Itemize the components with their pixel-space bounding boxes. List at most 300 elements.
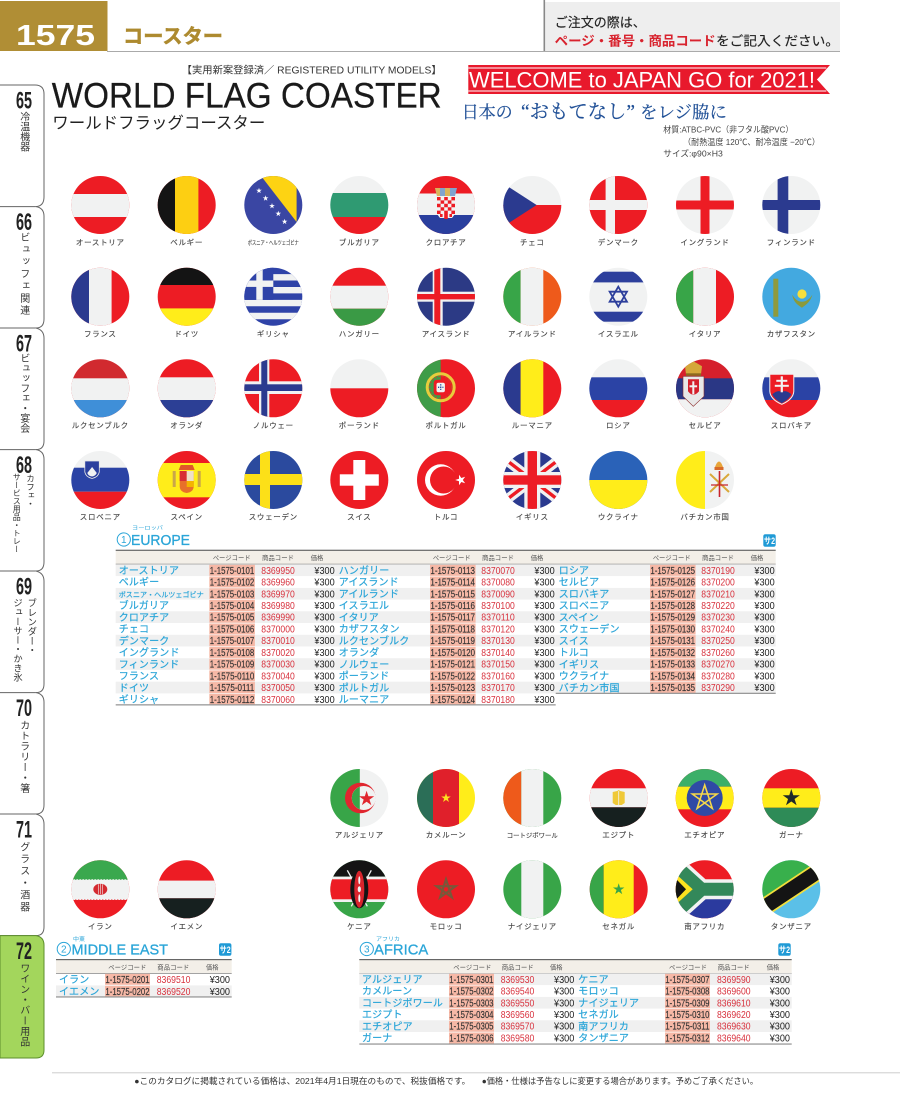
table: Middle East: 商品コード bbox=[157, 962, 189, 972]
table: Europe block 3: スペイン bbox=[559, 613, 599, 624]
table: Middle East: 8369510 bbox=[157, 975, 191, 986]
table: Europe block 1: ¥300 bbox=[313, 695, 335, 706]
table: Africa: 1-1575-0310 bbox=[665, 1010, 710, 1021]
table: Africa: ¥300 bbox=[553, 1010, 575, 1021]
table: Europe block 2: アイルランド bbox=[339, 588, 399, 600]
table: Europe block 1: 8370050 bbox=[261, 683, 295, 694]
table: Africa: ¥300 bbox=[769, 998, 790, 1009]
flag: South Africa: 南アフリカ bbox=[684, 921, 725, 931]
table: Europe block 1: 8370010 bbox=[261, 636, 295, 647]
table: Middle East: ページコード bbox=[108, 964, 146, 972]
flag: Czech Republic bbox=[503, 176, 562, 246]
header: order notice panel: ご注文の際は、 bbox=[555, 15, 646, 30]
table: Africa: ナイジェリア bbox=[578, 997, 639, 1009]
flag: Serbia: セルビア bbox=[689, 421, 721, 430]
badge: size 2: サ2 bbox=[764, 536, 775, 546]
table: Europe block 3: 1-1575-0131 bbox=[650, 636, 695, 647]
side tab 67: ビュッフェ・宴会 bbox=[18, 353, 30, 434]
table: Europe block 2: ノルウェー bbox=[339, 659, 389, 671]
table: Middle East: 1-1575-0201 bbox=[105, 975, 150, 986]
table: Europe block 2: ¥300 bbox=[533, 613, 555, 624]
table: Europe block 3: 1-1575-0129 bbox=[650, 613, 695, 624]
flag: Slovakia: スロバキア bbox=[771, 421, 812, 430]
table: Europe block 2: ¥300 bbox=[533, 695, 555, 706]
flag: Bosnia and Herzegovina bbox=[243, 175, 303, 247]
flag: United Kingdom bbox=[502, 450, 562, 522]
table: Africa: ¥300 bbox=[769, 1034, 790, 1044]
table: Africa: ¥300 bbox=[769, 986, 790, 998]
flag: Egypt bbox=[589, 768, 649, 840]
flag: Hungary: ハンガリー bbox=[339, 328, 380, 338]
table: Europe block 2: 8370160 bbox=[481, 671, 515, 682]
table: Europe block 1: 8369990 bbox=[261, 613, 295, 624]
table: Europe block 2: ¥300 bbox=[533, 566, 555, 577]
table: Europe block 2: 1-1575-0118 bbox=[430, 624, 475, 636]
table: Europe block 2: ¥300 bbox=[533, 660, 555, 671]
flag: Algeria: アルジェリア bbox=[335, 830, 384, 840]
flag: Romania: ルーマニア bbox=[512, 421, 553, 430]
table: Europe block 1: ¥300 bbox=[313, 648, 335, 659]
table: Europe block 3: ロシア bbox=[559, 566, 589, 577]
table: Europe block 2: 8370100 bbox=[481, 601, 515, 612]
table: Middle East: 8369520 bbox=[157, 987, 191, 998]
table: Africa: ¥300 bbox=[553, 986, 575, 998]
specifications: 材質:ATBC-PVC（非フタル酸PVC） bbox=[663, 124, 793, 134]
flag: Slovakia bbox=[761, 358, 821, 430]
table: Europe block 3: 8370250 bbox=[701, 636, 735, 647]
specifications: サイズ:φ90×H3 bbox=[663, 148, 723, 158]
flag: Ethiopia bbox=[675, 768, 735, 840]
flag: Germany: ドイツ bbox=[174, 330, 199, 338]
flag: Vatican City bbox=[675, 450, 735, 522]
table: Middle East bbox=[56, 959, 232, 998]
tagline: “おもてなし” bbox=[521, 102, 635, 123]
table: Middle East: イラン bbox=[59, 974, 89, 986]
table: Europe block 1: 1-1575-0103 bbox=[210, 589, 255, 600]
table: Europe block 1: ボスニア・ヘルツェゴビナ bbox=[119, 590, 204, 599]
flag: Tanzania: タンザニア bbox=[771, 922, 812, 931]
main title: WORLD FLAG COASTER bbox=[52, 76, 442, 116]
table: Europe block 1: クロアチア bbox=[119, 612, 169, 624]
table header: Europe: 価格 bbox=[531, 553, 544, 562]
table: Europe block 1: 1-1575-0101 bbox=[210, 566, 255, 577]
specifications: （耐熱温度 120℃、耐冷温度 −20℃） bbox=[683, 137, 820, 147]
table: Africa: ¥300 bbox=[769, 975, 790, 986]
badge: size 2 bbox=[778, 943, 791, 956]
table: Africa: 1-1575-0306 bbox=[449, 1034, 494, 1044]
flag: Greece: ギリシャ bbox=[257, 330, 290, 338]
table: Africa: エチオピア bbox=[362, 1021, 413, 1033]
flag: Portugal: ポルトガル bbox=[426, 420, 466, 430]
table: Europe block 1: イングランド bbox=[119, 646, 180, 659]
table: Africa: 8369640 bbox=[717, 1034, 751, 1044]
table: Africa: 1-1575-0308 bbox=[665, 986, 710, 998]
flag: Israel: イスラエル bbox=[598, 330, 639, 338]
table: Africa: アルジェリア bbox=[362, 975, 423, 986]
table: Europe block 3: 8370230 bbox=[701, 613, 735, 624]
table: Europe block 3: スイス bbox=[559, 636, 589, 647]
table: Europe block 2: イタリア bbox=[339, 612, 379, 624]
table: Europe block 1: 8369960 bbox=[261, 578, 295, 588]
flag: Norway: ノルウェー bbox=[253, 421, 294, 430]
flag: Luxembourg: ルクセンブルク bbox=[72, 420, 129, 430]
table: Africa: 8369580 bbox=[501, 1034, 535, 1044]
table: Europe block 2: 8370110 bbox=[481, 613, 515, 624]
table: Europe block 2: 8370090 bbox=[481, 589, 515, 600]
flag: Yemen bbox=[157, 859, 217, 931]
table: Africa: カメルーン bbox=[362, 986, 412, 998]
flag: France bbox=[70, 267, 130, 338]
table: Europe block 2: 1-1575-0116 bbox=[430, 601, 475, 612]
table: Africa: 価格 bbox=[550, 962, 563, 972]
flag: Denmark bbox=[588, 175, 648, 247]
section heading: Middle East: MIDDLE EAST bbox=[72, 942, 168, 958]
flag: Nigeria bbox=[502, 859, 562, 931]
table: Europe block 2: 1-1575-0117 bbox=[430, 613, 475, 624]
table: Europe block 1: 1-1575-0111 bbox=[210, 683, 255, 694]
table: Africa: 8369620 bbox=[717, 1010, 751, 1021]
side tab 67: 67 bbox=[16, 330, 32, 358]
side tab 69: 69 bbox=[16, 574, 32, 600]
table: Europe block 1: 8369970 bbox=[261, 589, 295, 600]
side tab 69: ジューサー・かき氷 bbox=[12, 598, 23, 682]
table: Africa: 商品コード bbox=[718, 962, 750, 972]
flag: Senegal: セネガル bbox=[602, 921, 635, 931]
table: Africa: タンザニア bbox=[578, 1033, 629, 1045]
table: Europe block 3: 1-1575-0135 bbox=[650, 683, 695, 694]
table: Europe block 3: スロバキア bbox=[559, 588, 609, 600]
flag: Ireland bbox=[502, 267, 562, 338]
table: Europe block 1: ¥300 bbox=[313, 636, 335, 647]
side tab 68 bbox=[0, 450, 44, 571]
table: Africa: ¥300 bbox=[553, 1022, 575, 1033]
table: Europe block 2: 1-1575-0122 bbox=[430, 671, 475, 682]
table: Europe block 3: ¥300 bbox=[753, 601, 775, 612]
side tab 65: 冷温機器 bbox=[18, 111, 30, 152]
flag: Iran: イラン bbox=[88, 922, 113, 931]
flag: Belgium: ベルギー bbox=[170, 238, 203, 247]
table: Europe block 1: 8370000 bbox=[261, 624, 295, 636]
table: Europe block 2: アイスランド bbox=[339, 577, 399, 589]
side tab 68: サービス用品・トレー bbox=[12, 473, 21, 553]
flag: Denmark: デンマーク bbox=[598, 237, 639, 247]
side tab 70 bbox=[0, 693, 44, 814]
table: Europe block 1: ¥300 bbox=[313, 566, 335, 577]
banner: welcome to japan: WELCOME to JAPAN GO for 2021! bbox=[469, 68, 815, 92]
flag: France: フランス bbox=[84, 330, 117, 338]
table: Europe block 3: 1-1575-0127 bbox=[650, 589, 695, 600]
header: page number block bbox=[0, 1, 108, 52]
flag: Finland: フィンランド bbox=[767, 238, 816, 247]
table header: Europe bbox=[116, 550, 776, 565]
flag: Cote d'Ivoire: コートジボワール bbox=[507, 832, 558, 840]
footer notes: ●価格・仕様は予告なしに変更する場合があります。予めご了承ください。 bbox=[482, 1076, 758, 1086]
flag: Tanzania bbox=[755, 859, 827, 931]
side tab 71: 71 bbox=[16, 816, 32, 844]
table: Africa: 1-1575-0301 bbox=[449, 975, 494, 986]
section heading: Middle East: 中東 bbox=[73, 935, 86, 943]
side tab 72 active: ワイン・バー用品 bbox=[18, 963, 30, 1047]
table: Europe block 2: 8370080 bbox=[481, 578, 515, 588]
flag: Sweden bbox=[243, 450, 303, 522]
flag: Ukraine: ウクライナ bbox=[598, 512, 639, 522]
flag: Switzerland: スイス bbox=[347, 512, 371, 522]
table: Europe block 3: 8370210 bbox=[701, 589, 735, 600]
table: Europe block 1: チェコ bbox=[119, 624, 149, 636]
tagline: をレジ脇に bbox=[640, 103, 727, 122]
flag: Luxembourg bbox=[70, 358, 130, 430]
section heading: Africa bbox=[360, 936, 428, 958]
table: Europe block 2: ハンガリー bbox=[339, 565, 389, 577]
flag: Norway bbox=[243, 358, 303, 430]
flag: South Africa bbox=[671, 859, 737, 931]
flag: Italy: イタリア bbox=[689, 330, 721, 338]
table: Europe block 2: ¥300 bbox=[533, 624, 555, 636]
table: Europe block 1: ¥300 bbox=[313, 660, 335, 671]
flag: Ghana: ガーナ bbox=[779, 830, 804, 840]
table: Europe block 1: 8369950 bbox=[261, 566, 295, 577]
table: Europe block 2: オランダ bbox=[339, 646, 379, 659]
table: Europe block 3: 1-1575-0125 bbox=[650, 566, 695, 577]
side tab 69: ブレンダー・ bbox=[25, 597, 37, 655]
table: Europe block 3: 1-1575-0132 bbox=[650, 648, 695, 659]
flag: Senegal bbox=[589, 859, 649, 931]
flag: Greece bbox=[243, 267, 303, 338]
flag: Cote d'Ivoire bbox=[502, 768, 562, 840]
table: Europe block 2: 8370070 bbox=[481, 566, 515, 577]
section heading: Europe: 1 bbox=[121, 535, 127, 546]
flag: Finland bbox=[761, 175, 821, 247]
table header: Europe: ページコード bbox=[653, 554, 691, 562]
table: Europe block 2: 8370130 bbox=[481, 636, 515, 647]
table: Africa: 1-1575-0309 bbox=[665, 998, 710, 1009]
flag: Turkey bbox=[416, 450, 476, 522]
table: Europe block 3: トルコ bbox=[559, 648, 589, 659]
table: Africa: ¥300 bbox=[769, 1022, 790, 1033]
badge: size 2: サ2 bbox=[779, 945, 790, 955]
table: Europe block 1: ¥300 bbox=[313, 589, 335, 600]
table: Europe block 2: ポルトガル bbox=[339, 682, 389, 694]
table header: Europe: 商品コード bbox=[262, 553, 294, 562]
flag: Bosnia and Herzegovina: ボスニア・ヘルツェゴビナ bbox=[248, 239, 299, 247]
flag: Ireland: アイルランド bbox=[508, 330, 557, 338]
flag: Austria bbox=[70, 175, 130, 247]
table: Africa: ケニア bbox=[578, 974, 609, 986]
side tab 67 bbox=[0, 328, 44, 450]
flag: Croatia: クロアチア bbox=[426, 238, 466, 247]
table: Europe block 3: ¥300 bbox=[753, 613, 775, 624]
table: Europe block 2: 1-1575-0115 bbox=[430, 589, 475, 600]
table: Europe block 2: ルクセンブルク bbox=[339, 634, 409, 647]
flag: Iceland bbox=[416, 267, 476, 338]
table: Europe block 2: 1-1575-0113 bbox=[430, 566, 475, 577]
table: Europe block 3: ¥300 bbox=[753, 660, 775, 671]
table: Europe block 3: ¥300 bbox=[753, 578, 775, 588]
table: Europe block 1: ¥300 bbox=[313, 613, 335, 624]
section heading: Africa: 3 bbox=[364, 945, 370, 956]
flag: England bbox=[675, 175, 735, 247]
flag: Morocco: モロッコ bbox=[430, 922, 462, 931]
side tab 70: カトラリー・箸 bbox=[18, 720, 30, 794]
table: Europe block 1: 1-1575-0102 bbox=[210, 578, 255, 588]
table: Europe block 1: 1-1575-0107 bbox=[210, 636, 255, 647]
table header: Europe: 価格 bbox=[751, 553, 764, 562]
table: Africa: 南アフリカ bbox=[578, 1020, 629, 1033]
table: Africa: 1-1575-0305 bbox=[449, 1022, 494, 1033]
table: Europe block 1: ¥300 bbox=[313, 671, 335, 682]
table: Europe block 1 bbox=[116, 564, 336, 706]
table: Europe block 3: 1-1575-0130 bbox=[650, 624, 695, 636]
table: Europe block 3: 8370270 bbox=[701, 660, 735, 671]
table header: Europe: ページコード bbox=[213, 554, 251, 562]
table: Europe block 1: 8370060 bbox=[261, 695, 295, 706]
section heading: Africa: AFRICA bbox=[374, 942, 428, 958]
flag: Russia bbox=[588, 358, 648, 430]
table: Africa: ガーナ bbox=[362, 1033, 392, 1045]
badge: size 2 bbox=[763, 534, 776, 547]
table: Europe block 2: 1-1575-0114 bbox=[430, 578, 475, 588]
table: Europe block 1: 8369980 bbox=[261, 601, 295, 612]
table: Europe block 2: ルーマニア bbox=[339, 695, 389, 706]
table header: Europe: 価格 bbox=[311, 553, 324, 562]
table: Europe block 1: 8370030 bbox=[261, 660, 295, 671]
table: Europe block 1: ¥300 bbox=[313, 624, 335, 636]
table: Europe block 2: ¥300 bbox=[533, 648, 555, 659]
table: Europe block 3: 1-1575-0128 bbox=[650, 601, 695, 612]
table: Europe block 2: ¥300 bbox=[533, 578, 555, 588]
table: Europe block 3: 8370290 bbox=[701, 683, 735, 694]
table: Europe block 2: ¥300 bbox=[533, 601, 555, 612]
section heading: Europe: EUROPE bbox=[131, 532, 190, 549]
flag: Bulgaria: ブルガリア bbox=[339, 237, 380, 247]
table: Europe block 3: 8370220 bbox=[701, 601, 735, 612]
table: Africa: ¥300 bbox=[553, 975, 575, 986]
header: page number block: 1575 bbox=[16, 20, 95, 52]
flag: Turkey: トルコ bbox=[434, 512, 458, 522]
header: order notice panel bbox=[544, 0, 840, 51]
table: Europe block 2: 8370180 bbox=[481, 695, 515, 706]
table: Europe block 2: ポーランド bbox=[339, 671, 389, 683]
table: Middle East: ¥300 bbox=[209, 987, 230, 998]
flag: Slovenia: スロベニア bbox=[80, 512, 121, 522]
side tab 66 bbox=[0, 207, 44, 328]
side tab 66: 66 bbox=[16, 209, 32, 236]
table: Africa: ¥300 bbox=[553, 1034, 575, 1044]
table: Europe block 3: セルビア bbox=[559, 577, 599, 589]
table: Africa: 8369540 bbox=[501, 986, 535, 998]
footer notes bbox=[52, 1072, 900, 1086]
table: Africa: 8369610 bbox=[717, 998, 751, 1009]
section heading: Europe: ヨーロッパ bbox=[132, 526, 163, 532]
flag: Ethiopia: エチオピア bbox=[684, 830, 725, 840]
table: Europe block 3: イギリス bbox=[559, 659, 599, 671]
header: order notice panel: ページ・番号・商品コード bbox=[555, 34, 716, 48]
table: Europe block 2: ¥300 bbox=[533, 671, 555, 682]
table: Europe block 3 bbox=[556, 564, 776, 694]
table: Africa: 1-1575-0307 bbox=[665, 975, 710, 986]
flag: Austria: オーストリア bbox=[76, 238, 125, 247]
side tab 68: 68 bbox=[16, 452, 32, 479]
table: Europe block 3: ¥300 bbox=[753, 566, 775, 577]
flag: Poland: ポーランド bbox=[339, 421, 380, 430]
table: Europe block 3: スロベニア bbox=[559, 600, 609, 612]
table: Europe block 3: ウクライナ bbox=[559, 671, 609, 683]
table: Europe block 3: 8370240 bbox=[701, 624, 735, 636]
table: Europe block 3: ¥300 bbox=[753, 671, 775, 682]
table: Europe block 1: 1-1575-0105 bbox=[210, 613, 255, 624]
table: Europe block 2: ¥300 bbox=[533, 589, 555, 600]
flag: Russia: ロシア bbox=[606, 421, 631, 430]
table: Europe block 2: 1-1575-0123 bbox=[430, 683, 475, 694]
flag: Czech Republic: チェコ bbox=[520, 238, 545, 247]
flag: Yemen: イエメン bbox=[170, 922, 203, 931]
flag: Slovenia bbox=[70, 450, 130, 522]
side tab 65 bbox=[0, 85, 44, 207]
section heading: Africa: アフリカ bbox=[376, 936, 400, 943]
table: Europe block 1: 1-1575-0109 bbox=[210, 660, 255, 671]
flag: Israel bbox=[588, 267, 648, 338]
table: Europe block 3: ¥300 bbox=[753, 683, 775, 694]
table: Europe block 1: ブルガリア bbox=[119, 599, 169, 612]
table: Europe block 2: イスラエル bbox=[339, 600, 389, 612]
tagline bbox=[462, 102, 727, 123]
section heading: Middle East: 2 bbox=[61, 945, 67, 956]
side tab 72 active bbox=[0, 936, 44, 1058]
side tab 68: カフェ・ bbox=[26, 474, 36, 508]
badge: size 2: サ2 bbox=[220, 945, 231, 955]
table: Africa: エジプト bbox=[362, 1009, 403, 1021]
table: Europe block 2: ¥300 bbox=[533, 636, 555, 647]
side tab 71: グラス・酒器 bbox=[18, 841, 30, 914]
table: Middle East: 1-1575-0202 bbox=[105, 987, 150, 998]
flag: Switzerland bbox=[329, 450, 389, 522]
specifications bbox=[663, 124, 820, 158]
flag: Netherlands: オランダ bbox=[170, 420, 203, 430]
table: Europe block 3: バチカン市国 bbox=[559, 681, 620, 694]
table: Europe block 3: 1-1575-0133 bbox=[650, 660, 695, 671]
tagline: 日本の bbox=[462, 103, 513, 122]
flag: Croatia bbox=[416, 175, 476, 247]
table: Europe block 2: 8370150 bbox=[481, 660, 515, 671]
table: Middle East: ¥300 bbox=[209, 975, 230, 986]
table: Africa: 商品コード bbox=[502, 962, 534, 972]
flag: Ghana bbox=[761, 768, 821, 840]
flag: Romania bbox=[502, 358, 562, 430]
flag: Kenya bbox=[329, 859, 389, 931]
flag: Kazakhstan bbox=[761, 267, 821, 338]
registered utility models note: 【実用新案登録済／ REGISTERED UTILITY MODELS】 bbox=[182, 64, 442, 77]
table: Africa: 8369590 bbox=[717, 975, 751, 986]
table: Europe block 2: カザフスタン bbox=[339, 624, 400, 636]
table: Europe block 1: デンマーク bbox=[119, 634, 169, 647]
table: Africa: 1-1575-0312 bbox=[665, 1034, 710, 1044]
flag: United Kingdom: イギリス bbox=[516, 512, 549, 522]
table: Africa: ¥300 bbox=[769, 1010, 790, 1021]
table: Europe block 2: 1-1575-0119 bbox=[430, 636, 475, 647]
table: Africa: 1-1575-0302 bbox=[449, 986, 494, 998]
table: Africa: 8369570 bbox=[501, 1022, 535, 1033]
flag: Iceland: アイスランド bbox=[422, 330, 470, 338]
flag: Sweden: スウェーデン bbox=[249, 512, 298, 522]
flag: Ukraine bbox=[588, 450, 648, 522]
footer notes: ●このカタログに掲載されている価格は、2021年4月1日現在のもので、税抜価格です。 bbox=[134, 1076, 470, 1086]
flag: England: イングランド bbox=[680, 237, 730, 247]
flag: Netherlands bbox=[157, 358, 217, 430]
header: order notice panel: をご記入ください。 bbox=[716, 34, 839, 48]
flag: Vatican City: バチカン市国 bbox=[680, 512, 730, 522]
table: Europe block 1: 8370020 bbox=[261, 648, 295, 659]
table: Middle East: イエメン bbox=[59, 987, 100, 998]
